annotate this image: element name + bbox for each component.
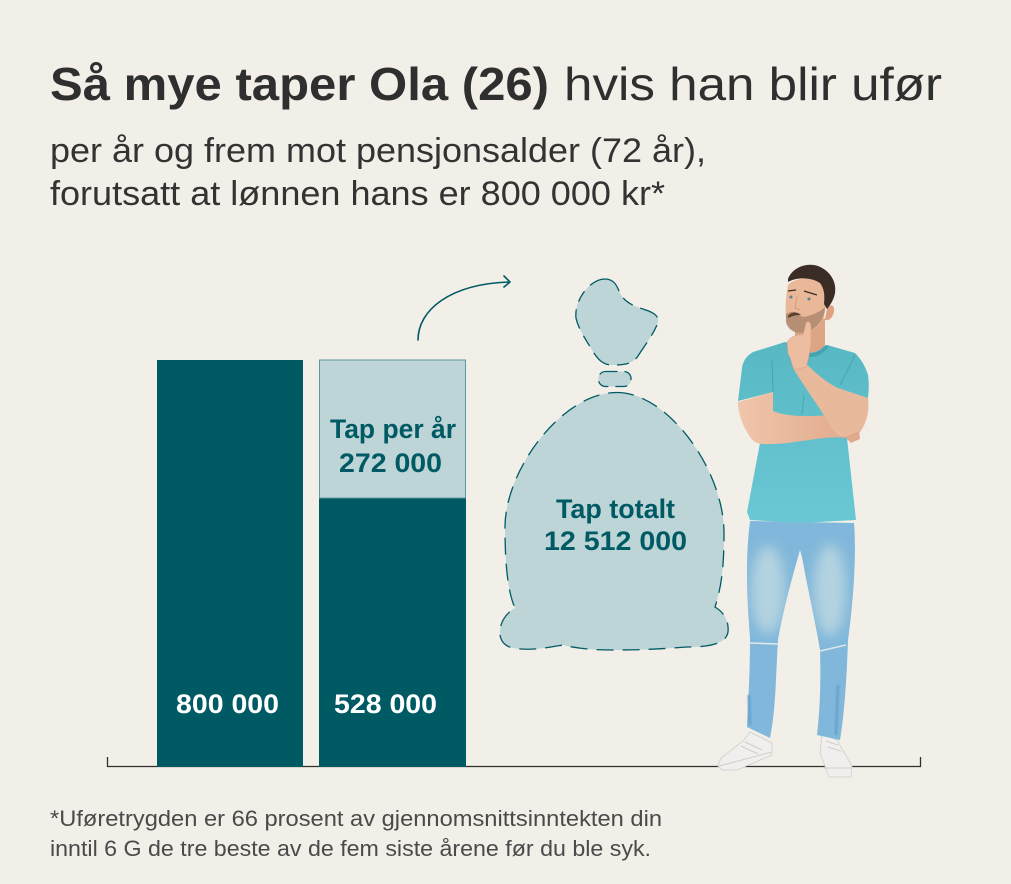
bar: disability benefit 528 000 bbox=[319, 498, 466, 767]
bar: salary 800 000 bbox=[157, 360, 303, 767]
bar: salary 800 000: 800 000 bbox=[176, 689, 279, 719]
jeans bbox=[747, 521, 855, 740]
shirt collar bbox=[806, 345, 829, 357]
footnote: inntil 6 G de tre beste av de fem siste årene før du ble syk. bbox=[50, 836, 651, 861]
chart baseline axis bbox=[108, 757, 920, 766]
footnote: *Uføretrygden er 66 prosent av gjennomsnittsinntekten din bbox=[50, 806, 662, 831]
money bag: total loss bbox=[500, 279, 728, 650]
bag label: Tap totalt bbox=[556, 494, 675, 524]
jeans highlights bbox=[751, 544, 846, 636]
subtitle bbox=[50, 132, 706, 213]
bar segment: yearly loss 272 000: Tap per år bbox=[330, 414, 456, 444]
bag label bbox=[544, 494, 687, 556]
footnote bbox=[50, 806, 662, 861]
right shoe bbox=[820, 733, 852, 777]
title: hvis han blir ufør bbox=[564, 58, 942, 110]
left shoe bbox=[718, 732, 772, 770]
brows and eyes bbox=[788, 290, 817, 295]
subtitle: per år og frem mot pensjonsalder (72 år), bbox=[50, 132, 706, 170]
title: Så mye taper Ola (26) bbox=[50, 58, 549, 110]
bar: disability benefit 528 000: 528 000 bbox=[334, 689, 437, 719]
shirt bbox=[738, 342, 869, 523]
bag tie bbox=[598, 372, 631, 386]
subtitle: forutsatt at lønnen hans er 800 000 kr* bbox=[50, 175, 665, 213]
ear bbox=[825, 305, 834, 320]
bag top knot bbox=[576, 279, 658, 365]
crossed arms bbox=[738, 364, 869, 444]
bar segment: yearly loss 272 000: 272 000 bbox=[339, 448, 442, 478]
bag label: 12 512 000 bbox=[544, 526, 687, 556]
moustache bbox=[788, 312, 801, 318]
beard bbox=[786, 307, 825, 333]
hand on chin bbox=[787, 322, 811, 370]
arrow to money bag bbox=[418, 276, 510, 340]
face bbox=[786, 278, 826, 333]
neck bbox=[795, 318, 825, 353]
nose bbox=[795, 296, 800, 310]
bag body bbox=[500, 392, 728, 650]
hair bbox=[788, 265, 835, 309]
bar segment: yearly loss 272 000 bbox=[320, 360, 466, 498]
head bbox=[786, 265, 835, 333]
person: thinking man bbox=[718, 265, 869, 777]
